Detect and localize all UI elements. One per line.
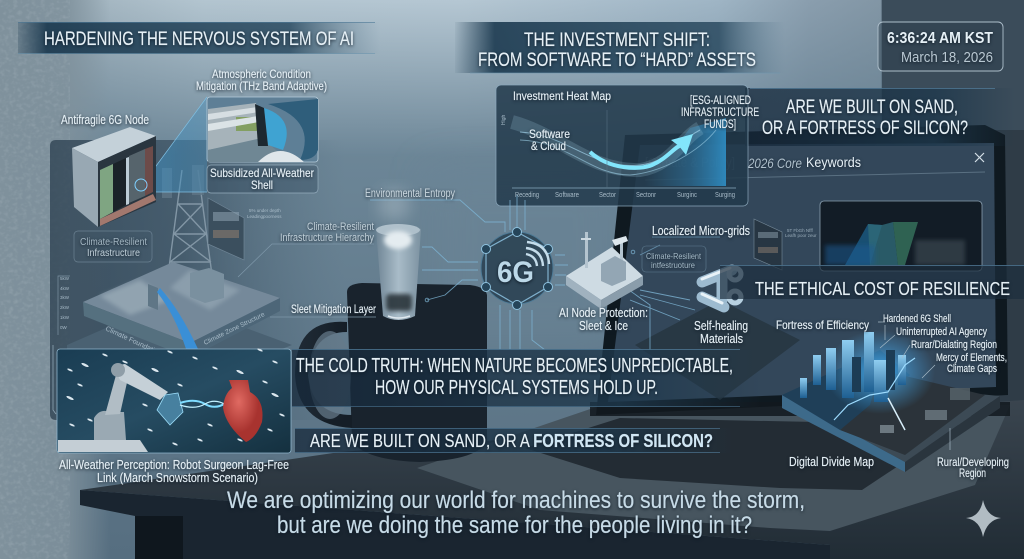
label box: climate-resilient infrastructure: Climate-Resilient (80, 236, 147, 248)
circuit lines around 6G hub (370, 195, 720, 350)
panel: investment heat map: INFRASTRUCTURE (681, 107, 759, 119)
platform: climate foundation layers (67, 262, 292, 385)
label: AI node protection: AI Node Protection: (559, 306, 648, 320)
screen chart panel (820, 201, 982, 271)
title: hardening the nervous system of AI (18, 22, 380, 54)
caption: all-weather perception: Link (March Snowstorm Scenario) (97, 470, 258, 485)
vertical axis ticks on hardening panel: 2kW (60, 305, 70, 310)
vertical axis ticks on hardening panel: 3kW (60, 295, 70, 300)
cyan energy link (180, 401, 226, 407)
panel: investment heat map: Sectonr (636, 192, 657, 199)
desk and dark table (80, 400, 1024, 559)
label box: subsidized shell: Shell (251, 178, 273, 192)
small chart card on screen (754, 219, 817, 270)
faded keywords window title on laptop screen: 2026 Core (747, 155, 802, 171)
label: self-healing materials (694, 319, 748, 346)
banner: the cold truth: THE COLD TRUTH: WHEN NATURE BECOMES UNPREDICTABLE, (296, 355, 733, 377)
timestamp box (878, 22, 1003, 71)
icon: 6G hub: 6G (497, 256, 534, 289)
panel: investment heat map: & Cloud (531, 139, 566, 153)
closing question (227, 487, 805, 539)
timestamp box: 6:36:24 AM KST (887, 30, 993, 47)
panel: investment heat map: Receding (515, 192, 539, 199)
vertical axis ticks on hardening panel: 5kW (60, 276, 70, 281)
heat map area chart: High (501, 114, 507, 125)
panel: are we built on sand heading (745, 88, 1015, 146)
panel: hardening backdrop (50, 140, 345, 420)
icon: micro-grid platform (566, 232, 643, 309)
icon: red heart (223, 380, 262, 442)
vertical axis ticks on hardening panel: 1kW (60, 315, 70, 320)
label box: climate-resilient small: Climate-Resilient (646, 251, 702, 261)
city towers (800, 332, 906, 402)
vertical axis ticks on hardening panel: 0W (60, 325, 68, 330)
faded keywords window title on laptop screen (645, 153, 985, 180)
map labels (776, 313, 1009, 480)
small data card near tower (208, 198, 282, 260)
laptop (417, 125, 1010, 531)
label: AI node protection (559, 306, 648, 333)
map labels: Digital Divide Map (789, 455, 874, 469)
title: the investment shift: THE INVESTMENT SHIFT: (524, 29, 710, 51)
map: digital divide isometric (782, 322, 1000, 472)
label: climate-resilient infrastructure hierarchy: Infrastructure Hierarchy (280, 232, 374, 244)
icon: frosted glass of water (376, 189, 421, 320)
map labels: Uninterrupted AI Agency (896, 326, 987, 338)
map labels: Fortress of Efficiency (776, 318, 869, 332)
equipment cabinets (190, 268, 224, 303)
label box: climate-resilient infrastructure (74, 231, 152, 262)
icon: self-healing materials (702, 268, 741, 307)
terrain block (782, 385, 1000, 462)
blue data beam (157, 288, 198, 349)
label: AI node protection: Sleet & Ice (579, 319, 628, 333)
label: sleet mitigation layer (270, 304, 376, 317)
timestamp box: March 18, 2026 (901, 49, 993, 66)
robot arm (94, 411, 126, 440)
label box: climate-resilient small (642, 246, 706, 272)
panel: investment heat map: Surging (715, 192, 735, 199)
lower slab (67, 300, 292, 385)
panel: investment heat map: Investment Heat Map (513, 89, 611, 103)
label box: climate-resilient infrastructure: Infrastructure (87, 247, 140, 259)
inset: THz band antenna close-up (207, 97, 318, 162)
vertical axis ticks on hardening panel (58, 276, 70, 335)
icon: 6G hub (481, 228, 553, 310)
laptop screen bezel (596, 125, 1008, 415)
caption: all-weather perception (59, 457, 289, 485)
label: self-healing materials: Self-healing (694, 319, 748, 333)
laptop base (417, 405, 1010, 531)
vertical axis ticks on hardening panel: 4kW (60, 286, 70, 291)
icon: antifragile 6G node cabinet (72, 127, 156, 227)
label box: climate-resilient small: intfestruoture (651, 260, 695, 270)
label: antifragile 6G node: Antifragile 6G Node (61, 113, 149, 127)
panel: investment heat map: FUNDS] (704, 119, 736, 131)
faded keywords window title on laptop screen: Keywords (806, 154, 861, 170)
panel: investment heat map (496, 85, 759, 206)
label box: subsidized shell: Subsidized All-Weather (210, 166, 314, 180)
small data card near tower: 5% under depth (249, 208, 281, 213)
label: climate-resilient infrastructure hierarchy (238, 221, 374, 277)
platform: climate foundation layers: Climate Foundation (104, 325, 162, 358)
label: climate-resilient infrastructure hierarchy: Climate-Resilient (307, 221, 374, 233)
closing question: but are we doing the same for the people living in it? (277, 512, 752, 539)
closing question: We are optimizing our world for machines to survive the storm, (227, 487, 805, 514)
title: hardening the nervous system of AI: HARDENING THE NERVOUS SYSTEM OF AI (44, 28, 354, 50)
snow streaks (66, 348, 285, 446)
platform: climate foundation layers: Climate Zone Structure (203, 311, 266, 347)
mug (295, 283, 487, 462)
small chart card on screen: Leafh poor zeur (785, 233, 817, 238)
panel: investment heat map: Sector (599, 192, 617, 199)
panel: investment heat map: Surginc (677, 192, 697, 199)
banner: ethical cost of resilience (720, 265, 1024, 299)
banner: the cold truth (292, 349, 762, 407)
faded keywords window title on laptop screen: [Climate & Policy] (645, 154, 735, 170)
label: self-healing materials: Materials (700, 332, 743, 346)
panel: investment heat map: [ESG-ALIGNED (690, 95, 751, 107)
pedestal (58, 440, 148, 452)
map labels: Region (959, 466, 986, 480)
banner: are we built on sand, or a fortress of silicon: ARE WE BUILT ON SAND, OR A FORTRESS OF SILICON? (310, 431, 713, 451)
map labels: Rurar/Dialating Region (911, 339, 997, 351)
panel: investment heat map: Software (555, 192, 579, 199)
banner: the cold truth: HOW OUR PHYSICAL SYSTEMS HOLD UP. (375, 377, 658, 399)
label: localized micro-grids: Localized Micro-grids (652, 224, 750, 238)
callout beam from node to inset (142, 97, 207, 192)
map labels: Climate Gaps (947, 363, 997, 375)
panel: are we built on sand heading: ARE WE BUILT ON SAND, (786, 97, 958, 118)
panel: investment heat map: Software (529, 127, 570, 141)
title: the investment shift: FROM SOFTWARE TO “HARD” ASSETS (478, 49, 756, 71)
label: atmospheric condition mitigation (196, 67, 327, 93)
caption: all-weather perception: All-Weather Perception: Robot Surgeon Lag-Free (59, 457, 289, 472)
title: the investment shift (455, 22, 785, 73)
icon: sparkle watermark (966, 500, 1001, 537)
communications tower (162, 165, 214, 290)
label: environmental entropy: Environmental Entropy (365, 188, 455, 200)
small data card near tower: Leadingpoorness (247, 214, 282, 219)
label: atmospheric condition mitigation: Atmospheric Condition (212, 67, 311, 81)
panel: robot surgeon scene (57, 348, 291, 453)
map labels: Hardened 6G Shell (883, 313, 951, 325)
label box: subsidized shell (207, 165, 318, 193)
label: atmospheric condition mitigation: Mitigation (THz Band Adaptive) (196, 79, 327, 93)
heat map area chart (501, 110, 736, 188)
small chart card on screen: 5T FbGh Nfff (787, 228, 814, 233)
upper slab (83, 262, 280, 343)
label: sleet mitigation layer: Sleet Mitigation Layer (291, 304, 376, 316)
